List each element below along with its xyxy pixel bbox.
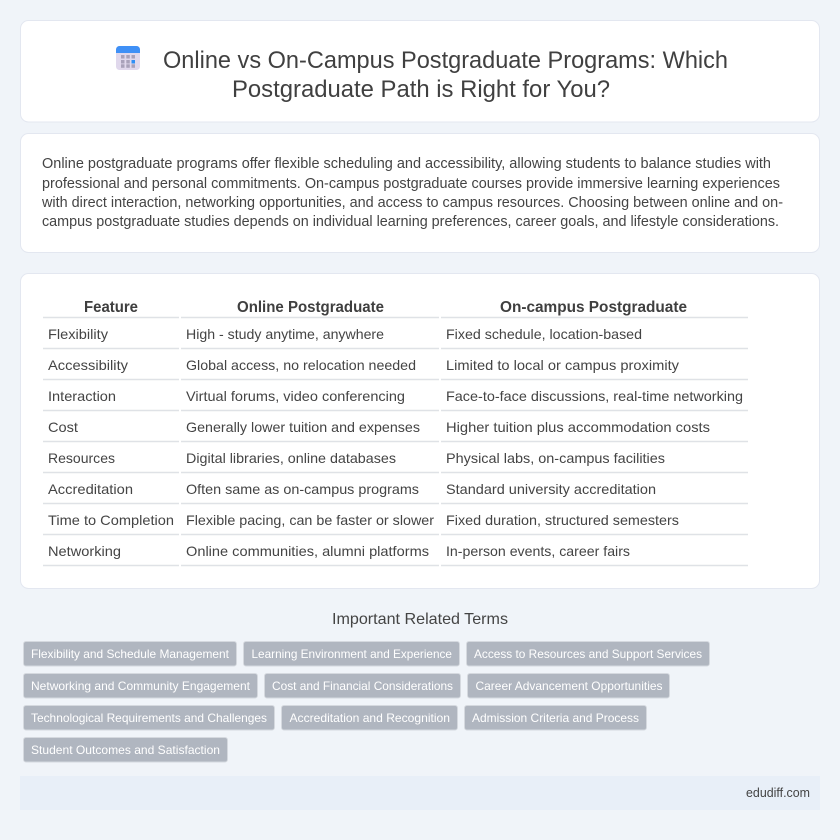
tags: related terms: Cost and Financial Considerations xyxy=(272,679,453,693)
table row: accreditation: Often same as on-campus programs xyxy=(186,481,419,497)
title: Postgraduate Path is Right for You? xyxy=(232,76,610,103)
tags: related terms: Learning Environment and Experience xyxy=(252,647,452,661)
panel: comparison table xyxy=(20,274,820,588)
panel: header xyxy=(20,20,820,122)
text block: introduction xyxy=(41,156,783,230)
table row: time to completion: Fixed duration, structured semesters xyxy=(446,512,679,528)
tags: related terms: Access to Resources and Support Services xyxy=(474,647,702,661)
tags: related terms: Student Outcomes and Satisfaction xyxy=(31,743,220,757)
table row: time to completion xyxy=(48,512,679,528)
table row: resources xyxy=(48,450,665,466)
table row: resources: Physical labs, on-campus facilities xyxy=(446,450,665,466)
table row: time to completion: Flexible pacing, can be faster or slower xyxy=(186,512,434,528)
table row: flexibility: Flexibility xyxy=(48,326,108,342)
table row: accreditation: Accreditation xyxy=(48,481,133,497)
table row: cost: Higher tuition plus accommodation costs xyxy=(446,419,710,435)
table row: flexibility: Fixed schedule, location-based xyxy=(446,326,642,342)
table row: interaction xyxy=(48,388,743,404)
table row: interaction: Face-to-face discussions, real-time networking xyxy=(446,388,743,404)
table row: accessibility: Accessibility xyxy=(48,357,128,373)
table row: networking: Online communities, alumni platforms xyxy=(186,543,429,559)
table header: Online Postgraduate xyxy=(237,299,384,316)
heading: important related terms: Important Related Terms xyxy=(332,611,508,628)
table row: networking: In-person events, career fairs xyxy=(446,543,630,559)
table row: accessibility: Limited to local or campus proximity xyxy=(446,357,679,373)
table row: accessibility: Global access, no relocation needed xyxy=(186,357,416,373)
table row: interaction: Virtual forums, video conferencing xyxy=(186,388,405,404)
table row: flexibility: High - study anytime, anywhere xyxy=(186,326,384,342)
tags: related terms: Career Advancement Opportunities xyxy=(476,679,662,693)
text block: introduction: Online postgraduate programs offer flexible scheduling and accessibility, allowing students to balance studies with xyxy=(42,156,771,172)
text block: introduction: with direct interaction, networking opportunities, and access to campus resources. Choosing between online and on- xyxy=(41,195,783,211)
table header: Feature xyxy=(84,299,138,316)
tags: related terms: Accreditation and Recognition xyxy=(290,711,450,725)
table row: accreditation xyxy=(48,481,656,497)
table row: accessibility xyxy=(48,357,679,373)
table row: networking xyxy=(48,543,630,559)
tags: related terms xyxy=(24,642,710,762)
tags: related terms: Technological Requirements and Challenges xyxy=(31,711,267,725)
table row: resources: Digital libraries, online databases xyxy=(186,450,396,466)
text block: introduction: campus postgraduate studies depends on individual learning preferences, career goals, and lifestyle considerations. xyxy=(42,214,779,230)
icon: calendar xyxy=(116,46,140,70)
table row: time to completion: Time to Completion xyxy=(48,512,174,528)
title: Online vs On-Campus Postgraduate Programs: Which xyxy=(163,47,728,74)
tags: related terms: Admission Criteria and Process xyxy=(472,711,639,725)
table row: flexibility xyxy=(48,326,642,342)
footer xyxy=(20,776,820,810)
table row: interaction: Interaction xyxy=(48,388,116,404)
table row: resources: Resources xyxy=(48,450,115,466)
text block: introduction: professional and personal commitments. On-campus postgraduate courses provide immersive learning experiences xyxy=(42,176,780,192)
table row: networking: Networking xyxy=(48,543,121,559)
table row: cost: Generally lower tuition and expenses xyxy=(186,419,420,435)
footer: edudiff.com xyxy=(746,786,810,800)
table row: cost: Cost xyxy=(48,419,78,435)
title xyxy=(163,47,728,103)
table row: accreditation: Standard university accreditation xyxy=(446,481,656,497)
tags: related terms: Networking and Community Engagement xyxy=(31,679,251,693)
panel: introduction xyxy=(20,134,820,252)
table row: cost xyxy=(48,419,710,435)
table header: On-campus Postgraduate xyxy=(500,299,687,316)
tags: related terms: Flexibility and Schedule Management xyxy=(31,647,230,661)
table header xyxy=(84,299,687,316)
